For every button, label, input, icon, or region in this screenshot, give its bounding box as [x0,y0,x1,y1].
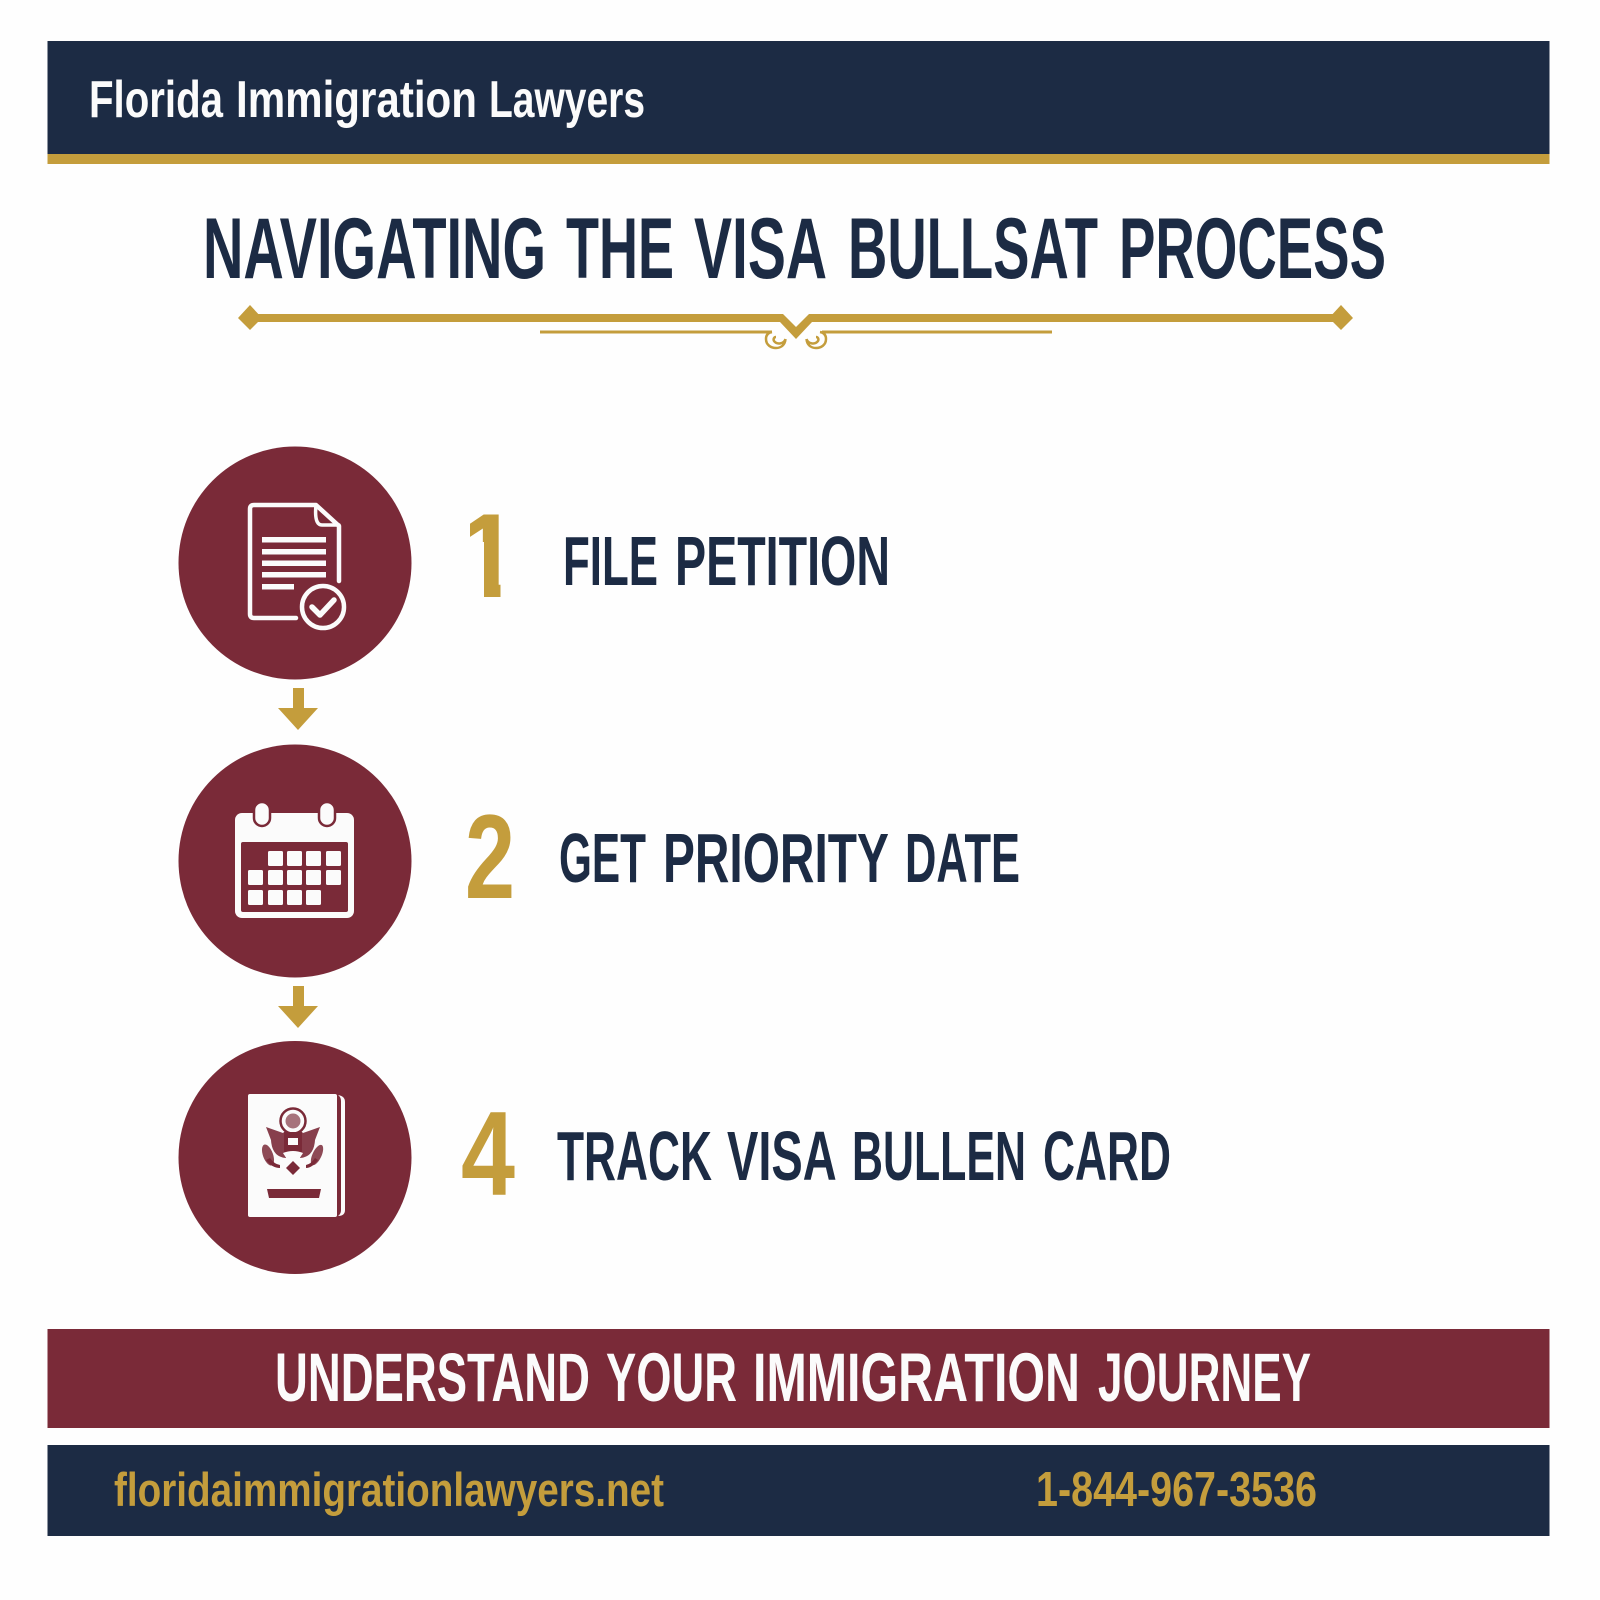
step 2 label: GET [559,819,646,897]
step 2 [178,744,1020,978]
icon: calendar [235,802,354,918]
step 2 label: PRIORITY [663,819,888,897]
step 1 circle [178,446,412,680]
step 3 [178,1041,1171,1274]
tagline text: JOURNEY [1098,1339,1311,1416]
title: NAVIGATING [203,201,546,297]
firm name: Florida [89,71,224,129]
arrow 1 to 2 [278,688,318,730]
passport bar [267,1189,321,1198]
step 3 label: CARD [1043,1117,1171,1195]
ornamental divider [238,305,1353,348]
icon: passport [248,1094,345,1217]
step 2 circle [178,744,412,978]
tagline text: YOUR [606,1339,737,1416]
website: floridaimmigrationlawyers.net [114,1463,664,1516]
step 1 [178,446,890,680]
firm name: Lawyers [489,71,645,129]
firm name: Immigration [236,71,477,129]
step 3 label: BULLEN [852,1117,1026,1195]
step 3 number: 4 [461,1087,515,1221]
passport eagle emblem [260,1108,326,1175]
title: VISA [694,201,826,297]
step 3 label: VISA [727,1117,836,1195]
step 2 label: DATE [905,819,1020,897]
step 3 label: TRACK [557,1117,712,1195]
title: PROCESS [1119,201,1386,297]
step 1 label: PETITION [675,522,890,600]
tagline text: UNDERSTAND [275,1339,590,1416]
title: THE [566,201,674,297]
icon: document with check [250,505,344,628]
step 2 number: 2 [465,790,515,924]
step 1 label: FILE [563,522,658,600]
footer band [48,1445,1550,1536]
tagline text: IMMIGRATION [753,1339,1080,1416]
arrow 2 to 3 [278,986,318,1028]
title: BULLSAT [848,201,1098,297]
header band [48,41,1550,164]
tagline banner [48,1329,1550,1428]
step 1 number: 1 [456,489,520,623]
phone number: 1-844-967-3536 [1036,1463,1317,1517]
step 3 circle [178,1041,412,1274]
